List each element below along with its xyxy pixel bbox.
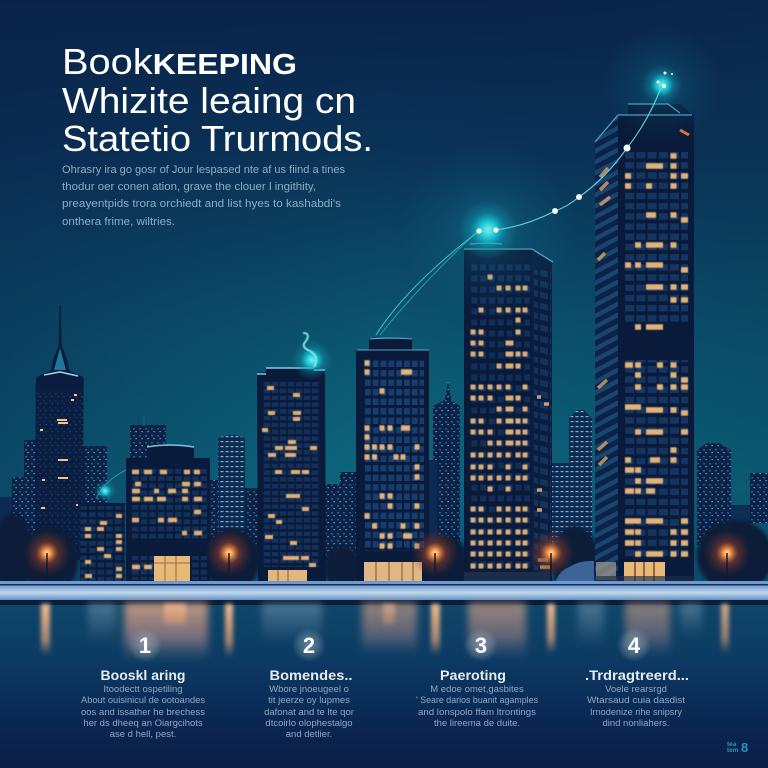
logo mark (727, 740, 748, 755)
step 2 description: Wbore jnoeugeel o (269, 684, 349, 695)
step 2 number: 2 (303, 633, 315, 658)
step 2 (264, 628, 354, 740)
lit windows building 2 (132, 472, 202, 567)
street lamps (23, 529, 751, 586)
intro paragraph: Ohrasry ira go gosr of Jour lespased nte af us fiind a tines (62, 164, 345, 176)
step 1 description (81, 684, 205, 740)
step 2 description (264, 684, 354, 740)
step 3 number: 3 (475, 633, 487, 658)
step 1 description: Itoodectt ospetiling (103, 684, 183, 695)
tall spire tower at far left (36, 306, 84, 560)
step 2 heading: Bomendes.. (270, 668, 352, 683)
building 2: wide block with lobby (126, 445, 210, 583)
step 3 (416, 628, 538, 729)
step 3 description (416, 684, 538, 729)
logo mark: 8 (741, 740, 748, 755)
step 4 heading: .Trdragtreerd... (585, 668, 689, 683)
background: night sky (0, 0, 768, 610)
building 4 (356, 338, 429, 583)
snowy riverbank (0, 581, 768, 605)
lit windows building 3 (262, 388, 317, 565)
step 2 description: dafonat and te lte qor (264, 707, 354, 718)
logo mark: tea (727, 741, 737, 748)
intro paragraph: thodur oer conen ation, grave the clouer l ingithity, (62, 181, 316, 193)
step 4 description: Voele rearsrgd (605, 684, 667, 695)
title: Statetio Trurmods. (62, 118, 373, 159)
building 6: tallest tower (595, 104, 694, 583)
lit windows building 5 (470, 277, 528, 566)
step 2 description: dtcoirlo olophestalgo (265, 718, 353, 729)
lit windows building 4 (364, 363, 420, 546)
logo mark: tem (727, 747, 739, 754)
step 1 description: her ds dheeq an Oiargcihots (83, 718, 203, 729)
lobby building 3 (268, 570, 307, 582)
step 3 description: and lonspolo ffam ltrontings (418, 707, 536, 718)
step 1 number: 1 (139, 633, 151, 658)
step 2 description: tit jeerze oy lupmes (268, 695, 350, 706)
lit windows building 1 (85, 516, 122, 576)
building 5 (464, 243, 553, 583)
water with reflections (0, 603, 768, 768)
intro paragraph: onthera frime, wiltries. (62, 216, 175, 228)
snow-covered bush (555, 561, 594, 585)
background skyline (0, 380, 768, 582)
step 3 description: ' Seare darios buanit agamples (416, 695, 538, 706)
step 4 (585, 628, 689, 729)
lobby building 4 (364, 562, 422, 582)
intro paragraph: preayentpids trora orchiedt and list hyes to kashabdi's (62, 198, 342, 210)
building 1: low block (80, 503, 125, 583)
step 1 description: About ouisinicul de ootoandes (81, 695, 205, 706)
step 4 description: Wtarsaud cuia dasdist (587, 695, 685, 706)
lit windows building 6 (625, 156, 688, 554)
title (62, 41, 373, 159)
step 4 description: dind nonliahers. (602, 718, 670, 729)
step 3 description: M edoe omet,gasbites (430, 684, 524, 695)
step 3 heading: Paeroting (440, 668, 506, 683)
title: Whizite leaing cn (62, 80, 356, 121)
swirl of light above building 3 (292, 333, 332, 380)
small signal at low block (94, 470, 126, 502)
title: Book KEEPING (62, 41, 297, 82)
rising growth line with light nodes (376, 25, 722, 335)
step 1 heading: Booskl aring (100, 668, 186, 683)
step 3 description: the lireema de duite. (434, 718, 520, 729)
lobby building 6 (596, 562, 665, 583)
step 2 description: and detlier. (286, 729, 332, 740)
intro paragraph (62, 164, 345, 228)
step 4 description (587, 684, 685, 729)
lobby building 2 (154, 556, 190, 582)
step 4 description: Irnodenize rihe snipsry (590, 707, 682, 718)
light nodes (476, 72, 673, 234)
building 3 with swirl (257, 367, 326, 583)
winter trees (0, 514, 768, 595)
step 4 number: 4 (628, 633, 641, 658)
step 1 description: ase d hell, pest. (110, 729, 176, 740)
step 1 (81, 628, 205, 740)
step 1 description: oos and issather he brechess (81, 707, 205, 718)
